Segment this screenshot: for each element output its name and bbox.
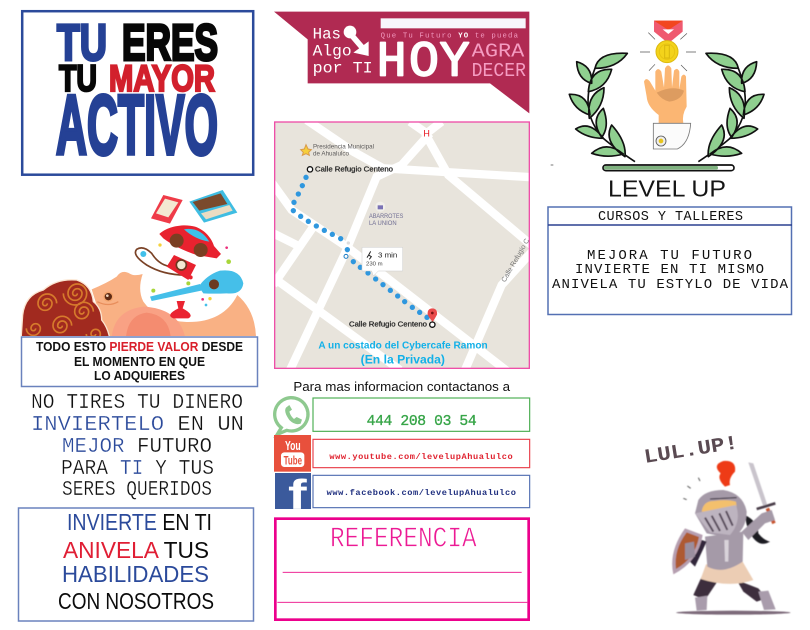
hospital marker: H (423, 129, 430, 139)
illustration: head with possessions (21, 190, 256, 341)
icon: facebook: f (288, 471, 307, 518)
plume (717, 461, 735, 487)
shield (672, 528, 703, 574)
text block: no tires tu dinero (31, 392, 244, 502)
panel: pierde valor: TODO ESTO PIERDE VALOR DESDE (36, 340, 243, 354)
contact heading: Para mas informacion contactanos a (293, 380, 511, 394)
banner text: hoy: HOY (377, 34, 470, 91)
panel: map: LA UNION (369, 221, 397, 227)
torso (705, 532, 743, 570)
panel text (552, 248, 789, 293)
panel: referencia: REFERENCIA (330, 523, 477, 556)
skirt (701, 560, 753, 584)
icon: hand (644, 65, 687, 123)
panel: map: ABARROTES (369, 214, 403, 220)
route dots (291, 175, 430, 320)
illustration: knight (642, 432, 791, 615)
shield arm (687, 540, 707, 567)
panel: title Tu eres tu mayor activo (22, 11, 253, 175)
sword (748, 462, 775, 523)
guitar (150, 270, 243, 301)
legs (693, 577, 717, 600)
panel text: ANIVELA TU ESTYLO DE VIDA (552, 277, 789, 293)
panel text: INVIERTE EN TI MISMO (575, 262, 764, 278)
icon: star (301, 145, 311, 155)
panel: invierte en ti: ANIVELA TUS (63, 537, 209, 563)
icon: youtube: Tube (284, 454, 302, 468)
phone box: 444 208 03 54 (367, 414, 477, 430)
panel: pierde valor: LO ADQUIERES (94, 369, 185, 383)
destination marker and label: Calle Refugio Centeno (349, 322, 427, 329)
map note: cybercafe (318, 341, 488, 366)
map labels (313, 144, 374, 157)
panel: pierde valor (22, 337, 258, 386)
text block: no tires tu dinero: SERES QUERIDOS (62, 479, 212, 502)
heading line: tu mayor: MAYOR (109, 58, 215, 99)
callout: 3 min: 230 m (366, 262, 383, 268)
text block: no tires tu dinero: PARA TI Y TUS (61, 458, 214, 481)
heading line: tu eres (57, 14, 218, 71)
action marks (683, 478, 700, 500)
icon: laurel left (569, 53, 635, 162)
icon: youtube: You (285, 438, 301, 453)
banner text: agradecer (472, 41, 526, 82)
contact section (274, 380, 530, 620)
logo: level up (551, 21, 764, 202)
youtube box (313, 439, 530, 468)
laptop (189, 190, 237, 223)
panel heading: CURSOS Y TALLERES (598, 210, 743, 225)
icon: laurel right (698, 53, 764, 162)
ground shadow (676, 611, 791, 615)
banner text: agradecer: AGRA (472, 41, 525, 63)
banner text: has algo por ti: por TI (313, 59, 373, 77)
destination marker and label (349, 308, 437, 329)
text block: no tires tu dinero: MEJOR FUTURO (62, 436, 212, 459)
youtube box: www.youtube.com/levelupAhualulco (329, 452, 513, 462)
panel: map: Calle Refugio C (501, 238, 531, 284)
hair (745, 515, 770, 544)
phone box (313, 398, 530, 431)
heading line: tu eres: TU (57, 14, 107, 71)
panel: cursos y talleres (548, 207, 792, 314)
map note: cybercafe: (En la Privada) (361, 352, 445, 366)
knight caption: LUL.UP! (642, 432, 740, 470)
facebook box: www.facebook.com/levelupAhualulco (327, 488, 516, 498)
banner text: has algo por ti: Has (313, 25, 341, 43)
car (159, 225, 221, 258)
text block: no tires tu dinero: INVIERTELO EN UN (31, 414, 244, 437)
heading line: tu mayor: TU (59, 58, 97, 99)
banner text: que tu futuro: Que Tu Futuro YO te pueda (381, 33, 519, 41)
heading: level up: LEVEL UP (608, 176, 726, 202)
helmet (695, 490, 747, 538)
banner text: has algo por ti: Algo (313, 43, 352, 61)
map roads (270, 120, 533, 373)
banner text: agradecer: DECER (472, 60, 526, 82)
callout: 3 min: 3 min (378, 251, 397, 260)
panel: invierte en ti: HABILIDADES (62, 561, 209, 587)
sword arm (742, 510, 775, 540)
panel: map (270, 120, 533, 373)
icon: medal (640, 21, 696, 71)
progress bar (603, 165, 734, 171)
facebook box (313, 475, 530, 508)
panel: pierde valor: EL MOMENTO EN QUE (74, 355, 205, 369)
map labels: de Ahualulco (313, 151, 350, 157)
icon: facebook (275, 471, 311, 518)
camera (135, 248, 196, 280)
banner text: has algo por ti (313, 25, 373, 77)
confetti dots (151, 243, 231, 306)
start marker and label: Calle Refugio Centeno (315, 167, 393, 174)
heading line: tu eres: ERES (122, 14, 218, 71)
eye (97, 292, 118, 304)
panel: referencia (275, 519, 529, 620)
text block: no tires tu dinero: NO TIRES TU DINERO (31, 392, 243, 415)
hair (21, 280, 110, 341)
money bag (170, 301, 191, 318)
face (92, 272, 256, 337)
map note: cybercafe: A un costado del Cybercafe Ramon (318, 341, 488, 352)
panel: invierte en ti (18, 508, 254, 621)
map labels: Presidencia Municipal (313, 144, 374, 150)
panel text: MEJORA TU FUTURO (587, 248, 752, 264)
heading line: activo: ACTIVO (56, 78, 218, 172)
icon: youtube (274, 435, 311, 472)
phone (151, 195, 183, 224)
icon: cuff (653, 123, 691, 149)
panel: invierte en ti: CON NOSOTROS (58, 588, 214, 614)
banner: has algo por ti (274, 12, 529, 113)
icon: store (375, 202, 385, 212)
icon: whatsapp (275, 398, 308, 434)
callout: 3 min (362, 247, 403, 276)
panel: invierte en ti: INVIERTE EN TI (67, 509, 212, 535)
heading line: tu mayor (59, 58, 215, 99)
icon: arrow (344, 26, 369, 56)
